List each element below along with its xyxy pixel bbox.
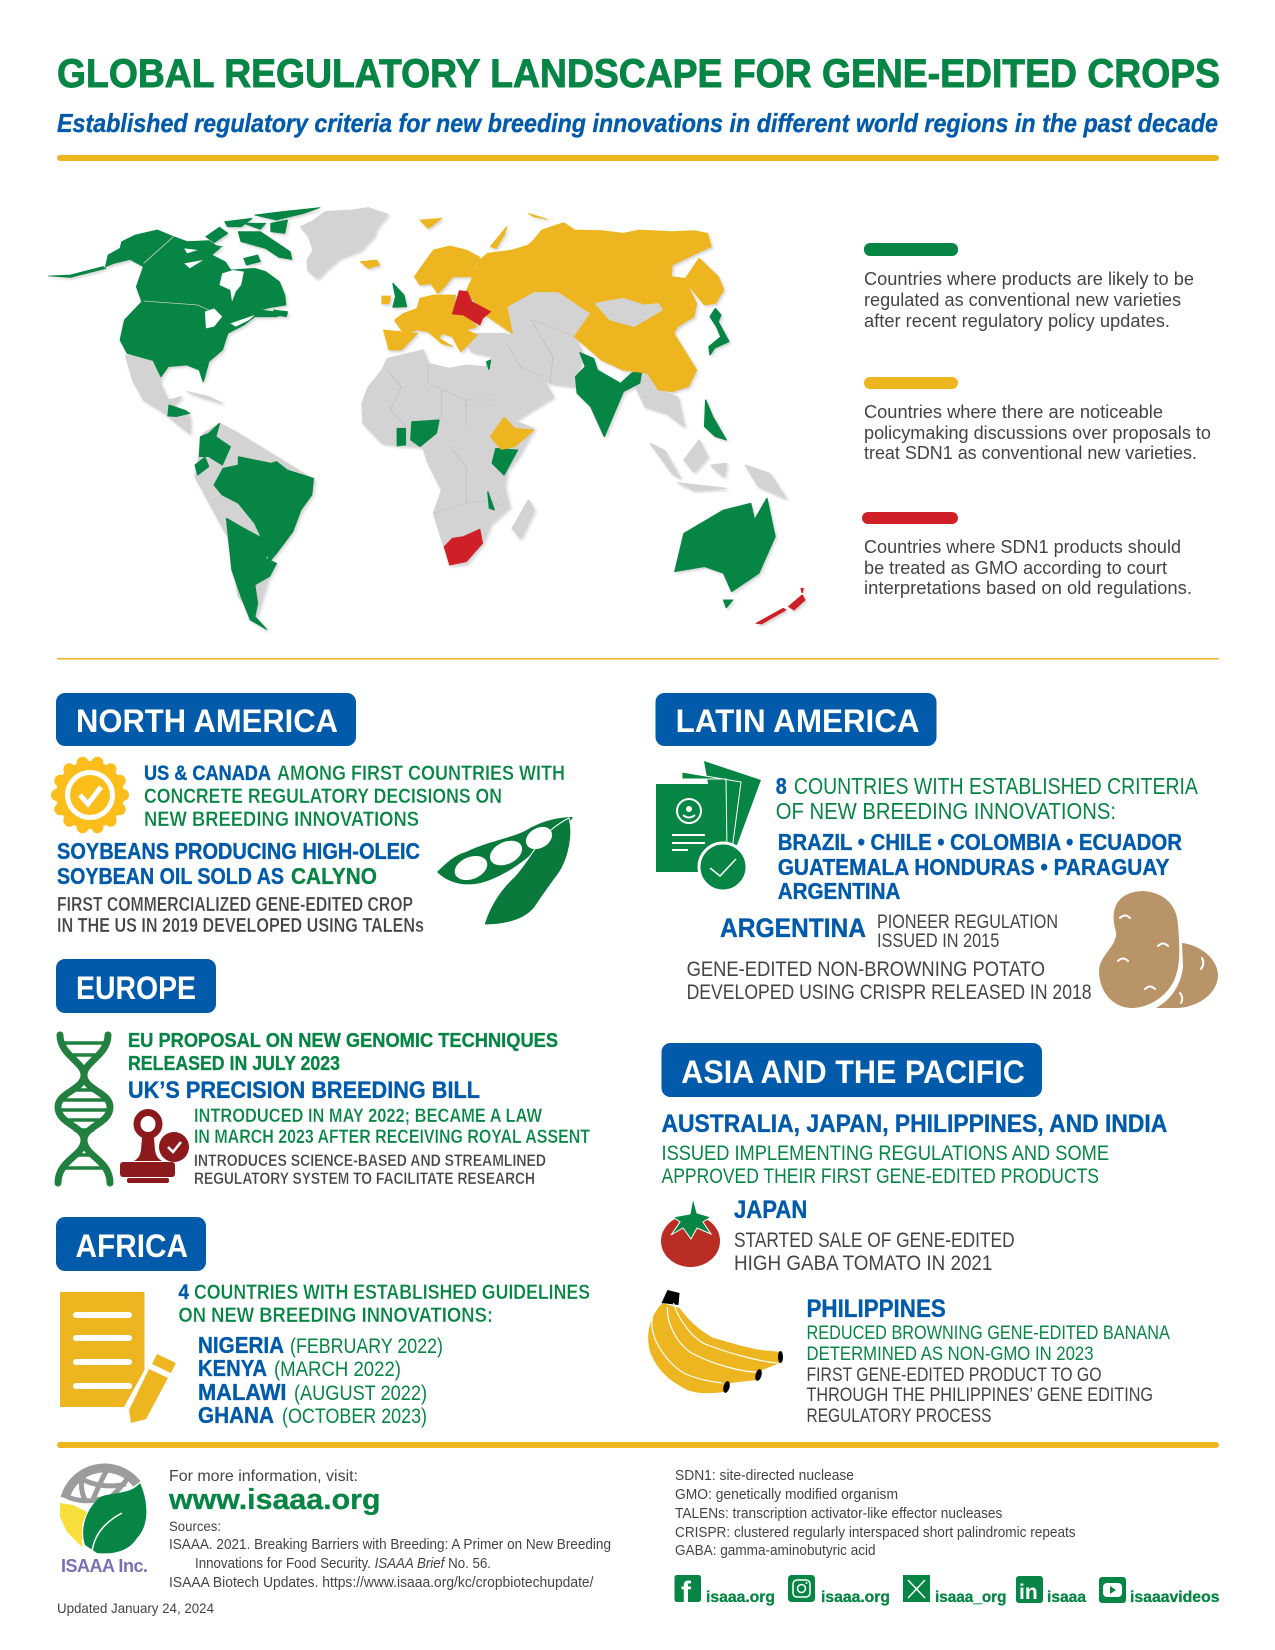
map: grey countries <box>126 208 786 630</box>
footer: social links: isaaa <box>1047 1589 1086 1606</box>
icon: Facebook <box>674 1575 701 1609</box>
footer: social links: isaaa.org <box>821 1589 890 1606</box>
footer: more information: ISAAA Biotech Updates. https://www.isaaa.org/kc/cropbiotechupdate/ <box>169 1575 594 1591</box>
text: Japan: HIGH GABA TOMATO IN 2021 <box>734 1252 992 1275</box>
text: US and Canada: CONCRETE REGULATORY DECISIONS ON <box>144 785 502 808</box>
legend: green: regulated as conventional new varieties <box>864 290 1181 310</box>
legend: green <box>864 243 1194 331</box>
heading: Latin America: LATIN AMERICA <box>676 703 920 739</box>
text: Latin America criteria <box>776 773 1198 824</box>
footer: updated date: Updated January 24, 2024 <box>57 1600 214 1616</box>
icon: LinkedIn <box>1016 1576 1043 1604</box>
heading: North America <box>56 693 356 746</box>
icon: bananas <box>648 1290 783 1394</box>
text: Africa guidelines: ON NEW BREEDING INNOVATIONS: <box>178 1304 493 1327</box>
legend: red <box>862 512 1192 598</box>
heading: Africa: AFRICA <box>76 1228 188 1264</box>
icon: soybean pods <box>437 817 573 925</box>
text: Philippines: FIRST GENE-EDITED PRODUCT TO GO <box>806 1365 1102 1386</box>
footer: glossary: SDN1: site-directed nuclease <box>675 1468 854 1484</box>
footer: more information: ISAAA. 2021. Breaking Barriers with Breeding: A Primer on New Breeding <box>169 1537 611 1553</box>
legend: red: interpretations based on old regulations. <box>864 578 1192 598</box>
text: Argentina: GENE-EDITED NON-BROWNING POTATO <box>687 958 1045 981</box>
text: soybeans: IN THE US IN 2019 DEVELOPED USING TALENs <box>57 915 424 937</box>
text: Latin America criteria: 8 <box>776 773 787 799</box>
text: Philippines: PHILIPPINES <box>806 1295 946 1323</box>
text: Asia summary: APPROVED THEIR FIRST GENE-EDITED PRODUCTS <box>662 1165 1099 1188</box>
heading: Europe: EUROPE <box>76 970 196 1006</box>
text: Philippines: REGULATORY PROCESS <box>806 1406 992 1427</box>
text: soybeans: FIRST COMMERCIALIZED GENE-EDITED CROP <box>57 894 413 916</box>
title: GLOBAL REGULATORY LANDSCAPE FOR GENE-EDITED CROPS <box>57 52 1220 96</box>
text: US and Canada: NEW BREEDING INNOVATIONS <box>144 808 419 831</box>
text: Japan: JAPAN <box>734 1196 807 1224</box>
text: Latin America criteria: OF NEW BREEDING INNOVATIONS: <box>776 798 1116 824</box>
list: Latin American countries <box>778 829 1182 904</box>
icon: YouTube <box>1099 1577 1126 1603</box>
list: African countries: MALAWI <box>198 1379 286 1405</box>
text: Africa guidelines: COUNTRIES WITH ESTABLISHED GUIDELINES <box>194 1281 590 1304</box>
icon: potatoes <box>1099 891 1218 1008</box>
legend: yellow <box>864 377 1211 463</box>
heading: Asia and the Pacific: ASIA AND THE PACIFIC <box>681 1054 1025 1090</box>
text: US and Canada: AMONG FIRST COUNTRIES WITH <box>277 762 565 785</box>
list: African countries: (MARCH 2022) <box>274 1358 401 1381</box>
map: green countries <box>49 208 775 629</box>
map: yellow countries <box>360 213 724 449</box>
text: UK bill: INTRODUCES SCIENCE-BASED AND STREAMLINED <box>194 1151 546 1170</box>
text: UK bill: INTRODUCED IN MAY 2022; BECAME A LAW <box>194 1106 542 1127</box>
legend: red: be treated as GMO according to court <box>864 558 1167 578</box>
list: African countries: KENYA <box>198 1355 267 1381</box>
text: Philippines: DETERMINED AS NON-GMO IN 2023 <box>806 1344 1094 1365</box>
list: Latin American countries: ARGENTINA <box>778 878 900 904</box>
icon: document and pencil <box>60 1292 176 1423</box>
text: Philippines: REDUCED BROWNING GENE-EDITED BANANA <box>806 1323 1170 1344</box>
heading: Latin America <box>656 693 936 746</box>
heading: Europe <box>56 959 216 1013</box>
legend <box>862 243 1211 598</box>
icon: LinkedIn: in <box>1019 1581 1038 1604</box>
list: African countries: (OCTOBER 2023) <box>282 1405 427 1428</box>
text: Asia summary: ISSUED IMPLEMENTING REGULATIONS AND SOME <box>662 1142 1109 1165</box>
heading: North America: NORTH AMERICA <box>76 703 338 739</box>
text: US and Canada: US & CANADA <box>144 762 271 785</box>
icon: Instagram <box>788 1575 815 1602</box>
panel: Africa <box>56 1217 590 1428</box>
text: Japan <box>734 1196 1015 1275</box>
footer: ISAAA logo <box>60 1468 148 1576</box>
list: African countries: (AUGUST 2022) <box>294 1382 427 1405</box>
text: soybeans: SOYBEAN OIL SOLD AS <box>57 863 284 889</box>
text: soybeans: CALYNO <box>291 863 377 889</box>
text: EU proposal: EU PROPOSAL ON NEW GENOMIC TECHNIQUES <box>128 1030 558 1052</box>
icon: DNA helix <box>58 1035 110 1183</box>
footer: ISAAA logo: ISAAA Inc. <box>61 1556 148 1576</box>
icon: X <box>903 1575 930 1602</box>
panel: North America <box>51 693 573 937</box>
text: Philippines: THROUGH THE PHILIPPINES’ GENE EDITING <box>806 1385 1153 1406</box>
icon: Facebook: f <box>681 1576 692 1609</box>
legend: yellow: Countries where there are noticeable <box>864 402 1163 422</box>
text: Japan: STARTED SALE OF GENE-EDITED <box>734 1229 1015 1252</box>
footer: more information: Innovations for Food Security. ISAAA Brief No. 56. <box>195 1556 491 1572</box>
footer: glossary: GMO: genetically modified organism <box>675 1487 898 1503</box>
footer: more information <box>168 1468 611 1591</box>
list: Latin American countries: GUATEMALA HONDURAS • PARAGUAY <box>778 854 1169 880</box>
text: Asia summary: AUSTRALIA, JAPAN, PHILIPPINES, AND INDIA <box>662 1110 1167 1138</box>
footer: glossary: CRISPR: clustered regularly interspaced short palindromic repeats <box>675 1525 1076 1541</box>
text: Latin America criteria: COUNTRIES WITH ESTABLISHED CRITERIA <box>794 773 1198 799</box>
footer: glossary: TALENs: transcription activator-like effector nucleases <box>675 1506 1002 1522</box>
panel: Asia and the Pacific <box>648 1043 1170 1427</box>
legend: yellow: policymaking discussions over proposals to <box>864 423 1211 443</box>
text: UK bill <box>128 1077 590 1188</box>
text: UK bill: UK’S PRECISION BREEDING BILL <box>128 1077 480 1104</box>
world map <box>49 208 805 630</box>
map: grey borders <box>388 320 575 513</box>
panel: Europe <box>56 959 590 1188</box>
icon: tomato <box>661 1198 720 1267</box>
text: EU proposal: RELEASED IN JULY 2023 <box>128 1053 340 1075</box>
text: soybeans: SOYBEANS PRODUCING HIGH-OLEIC <box>57 838 420 864</box>
text: US and Canada <box>144 762 565 831</box>
text: EU proposal <box>128 1030 558 1075</box>
footer: glossary: GABA: gamma-aminobutyric acid <box>675 1543 876 1559</box>
footer: glossary <box>675 1468 1076 1559</box>
text: Argentina: PIONEER REGULATION <box>877 912 1058 933</box>
text: UK bill: REGULATORY SYSTEM TO FACILITATE RESEARCH <box>194 1169 535 1188</box>
text: Argentina <box>687 912 1092 1004</box>
map: North America details <box>184 248 255 328</box>
icon: stamp <box>120 1112 189 1183</box>
list: African countries <box>198 1332 443 1428</box>
text: soybeans <box>57 838 424 937</box>
text: Argentina: ISSUED IN 2015 <box>877 931 999 952</box>
legend: red: Countries where SDN1 products should <box>864 537 1181 557</box>
legend: yellow: treat SDN1 as conventional new varieties. <box>864 443 1197 463</box>
footer: social links: isaaa_org <box>935 1589 1006 1606</box>
text: Argentina: ARGENTINA <box>720 913 866 943</box>
list: Latin American countries: BRAZIL • CHILE • COLOMBIA • ECUADOR <box>778 829 1182 855</box>
icon: approval seal <box>51 757 129 833</box>
text: Africa guidelines <box>178 1281 590 1327</box>
legend: green: Countries where products are likely to be <box>864 269 1194 289</box>
icon: certified documents <box>656 761 761 891</box>
text: Argentina: DEVELOPED USING CRISPR RELEASED IN 2018 <box>687 981 1092 1004</box>
panel: Latin America <box>656 693 1218 1008</box>
map: Mongolia <box>595 298 662 327</box>
footer: more information: For more information, visit: <box>169 1468 358 1485</box>
text: Africa guidelines: 4 <box>178 1281 189 1304</box>
footer: social links <box>674 1575 1220 1609</box>
legend: green: after recent regulatory policy updates. <box>864 311 1170 331</box>
heading: Africa <box>56 1217 206 1271</box>
text: UK bill: IN MARCH 2023 AFTER RECEIVING ROYAL ASSENT <box>194 1127 590 1148</box>
list: African countries: NIGERIA <box>198 1332 284 1358</box>
list: African countries: (FEBRUARY 2022) <box>290 1335 443 1358</box>
list: African countries: GHANA <box>198 1402 274 1428</box>
text: Philippines <box>806 1295 1170 1427</box>
heading: Asia and the Pacific <box>662 1043 1042 1097</box>
footer: social links: isaaavideos <box>1130 1589 1220 1606</box>
map: red countries <box>444 291 805 624</box>
footer: more information: www.isaaa.org <box>168 1484 380 1516</box>
text: Asia summary <box>662 1110 1167 1188</box>
footer: social links: isaaa.org <box>706 1589 775 1606</box>
footer: more information: Sources: <box>169 1518 221 1534</box>
